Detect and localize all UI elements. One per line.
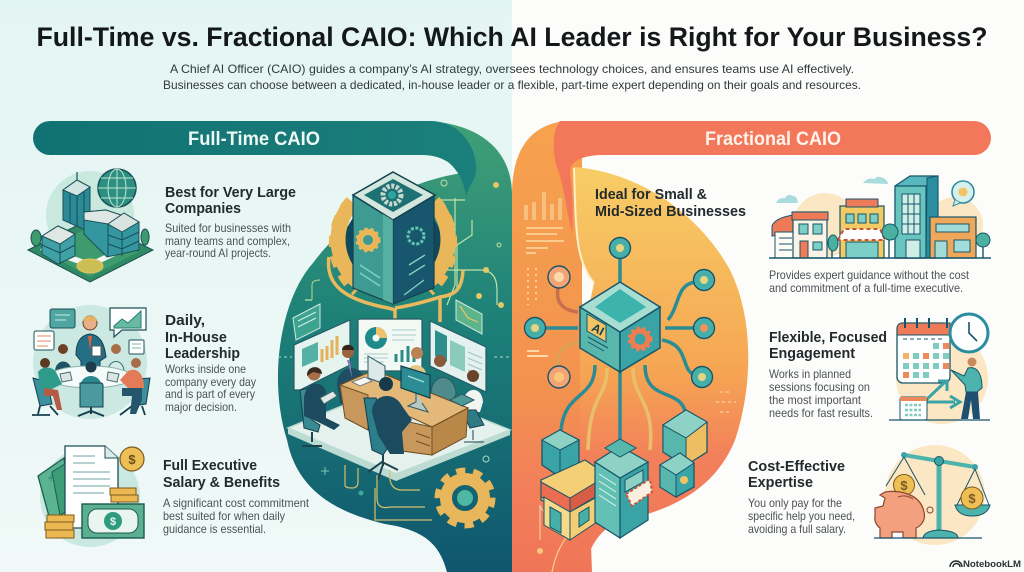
illustration: AI cube network: AI <box>589 320 606 338</box>
text block: best for very large companies <box>165 185 296 260</box>
illustration: fractional panel decorations <box>526 168 736 572</box>
text block: daily in-house leadership: Daily, <box>165 313 205 329</box>
text block: cost-effective expertise: You only pay for the <box>748 497 842 510</box>
person: woman and men far <box>411 347 423 359</box>
right background <box>512 0 1024 572</box>
chart panel: left screen <box>294 320 350 390</box>
illustration: AI cube network <box>524 238 714 540</box>
text block: best for very large companies: many teams and complex, <box>165 235 290 248</box>
person <box>968 358 976 366</box>
text block: full executive salary and benefits: Salary & Benefits <box>163 475 280 491</box>
icon: scale and piggy bank: $ <box>968 491 976 506</box>
dashed links at screen level <box>278 356 512 358</box>
text block: expert guidance: and commitment of a full-time executive. <box>769 282 963 295</box>
nodes <box>524 238 714 388</box>
piggy bank <box>875 491 924 538</box>
text block: expert guidance: Provides expert guidance without the cost <box>769 269 970 282</box>
person: front at desk <box>364 398 393 455</box>
left background <box>0 0 512 572</box>
illustration: office platform <box>288 384 510 481</box>
text block: full executive salary and benefits: A significant cost commitment <box>163 497 310 510</box>
text block: best for very large companies: Best for Very Large <box>165 185 296 201</box>
panel: fractional banner <box>554 121 991 232</box>
text block: flexible focused engagement: needs for fast results. <box>769 407 873 420</box>
banner label: Fractional CAIO: Fractional CAIO <box>705 129 841 150</box>
text block: cost-effective expertise: Expertise <box>748 475 813 491</box>
logo: NotebookLM: NotebookLM <box>963 559 1021 570</box>
teal tower <box>895 176 938 258</box>
panel: full-time banner <box>33 121 476 196</box>
person: seated left with laptop <box>300 388 320 432</box>
shop <box>541 460 600 525</box>
text block: flexible focused engagement: Flexible, Focused <box>769 330 887 346</box>
text block: full executive salary and benefits <box>163 458 310 536</box>
person: standing man back <box>337 368 368 408</box>
tower building <box>595 462 620 538</box>
circuit lines <box>305 198 497 305</box>
text block: cost-effective expertise: Cost-Effective <box>748 459 845 475</box>
back seated team <box>58 344 68 354</box>
icon: salary and money <box>38 446 144 547</box>
gear crescents <box>338 203 448 285</box>
small calendar <box>900 397 927 420</box>
icon: scale and piggy bank <box>874 445 990 545</box>
icon: leadership meeting <box>32 305 150 419</box>
text block: daily in-house leadership: Leadership <box>165 346 240 362</box>
icon: scale and piggy bank: $ <box>900 478 908 493</box>
text block: best for very large companies: year-round AI projects. <box>165 247 271 260</box>
table <box>48 366 132 388</box>
text block: best for very large companies: Suited for businesses with <box>165 222 291 235</box>
text block: flexible focused engagement: the most important <box>769 394 862 407</box>
connectors <box>545 258 695 450</box>
text block: daily in-house leadership: major decision. <box>165 401 237 414</box>
chart panel: right side small <box>456 300 482 334</box>
icon: corporate campus and globe <box>28 169 153 282</box>
icon: small business street <box>769 176 991 258</box>
chart panel: left side small <box>293 280 320 340</box>
text block: ideal for small and mid-sized businesses: Ideal for Small & <box>595 187 708 203</box>
text block: flexible focused engagement: Works in planned <box>769 368 851 381</box>
monitors <box>368 356 385 384</box>
text block: full executive salary and benefits: best suited for when daily <box>163 510 285 523</box>
text block: cost-effective expertise: specific help you need, <box>748 510 855 523</box>
text block: daily in-house leadership: Works inside one <box>165 363 246 376</box>
illustration: lower circuit and gear <box>321 456 492 525</box>
right box <box>663 410 707 466</box>
side chairs <box>33 378 150 406</box>
arrows <box>924 381 960 408</box>
icon: calendar with clock and person <box>889 314 990 424</box>
tower body <box>353 195 393 304</box>
intro text: Businesses can choose between a dedicated, in-house leader or a flexible, part-time expert depending on their goals and resources. <box>163 78 861 92</box>
text block: flexible focused engagement: sessions focusing on <box>769 381 870 394</box>
panel: full-time backdrop shape <box>278 121 512 572</box>
text block: full executive salary and benefits: Full Executive <box>163 458 257 474</box>
intro text: A Chief AI Officer (CAIO) guides a company’s AI strategy, oversees technology choices, and ensures teams use AI effectively. <box>170 62 854 76</box>
desk <box>340 370 468 427</box>
presenter <box>76 334 106 378</box>
text block: flexible focused engagement <box>769 330 887 420</box>
intro text <box>163 62 861 92</box>
dark recess behind tower <box>343 198 443 298</box>
cube <box>580 307 620 372</box>
illustration: AI tower with gears <box>305 172 504 322</box>
small cube <box>542 430 579 477</box>
trees <box>832 240 983 258</box>
icon: salary and money: $ <box>128 452 136 467</box>
banner label: Full-Time CAIO: Full-Time CAIO <box>188 129 320 150</box>
text block: daily in-house leadership: In-House <box>165 330 227 346</box>
text block: daily in-house leadership: company every day <box>165 376 256 389</box>
icon: salary and money: $ <box>110 516 116 528</box>
text block: ideal for small and mid-sized businesses: Mid-Sized Businesses <box>595 204 746 220</box>
text block: best for very large companies: Companies <box>165 201 241 217</box>
gold connector ring <box>328 257 463 322</box>
text block: cost-effective expertise: avoiding a full salary. <box>748 523 846 536</box>
panel: fractional backdrop shape <box>512 121 592 572</box>
chart panel: centre screen with pie chart <box>358 319 422 371</box>
text block: full executive salary and benefits: guidance is essential. <box>163 523 266 536</box>
red house <box>772 215 793 236</box>
title: Full-Time vs. Fractional CAIO: Which AI Leader is Right for Your Business? <box>36 22 988 52</box>
yellow shop <box>840 206 884 258</box>
illustration: desk and team <box>300 345 484 480</box>
text block: expert guidance <box>769 269 970 295</box>
text block: ideal for small and mid-sized businesses <box>595 187 746 220</box>
panel: fractional inner sunburst <box>574 167 748 572</box>
speech bubble <box>952 181 974 203</box>
text block: flexible focused engagement: Engagement <box>769 346 855 362</box>
text block: daily in-house leadership: and is part of every <box>165 388 255 401</box>
chart panel: right screen <box>430 321 486 392</box>
text block: cost-effective expertise <box>748 459 855 536</box>
orange building <box>930 217 976 258</box>
text block: daily in-house leadership <box>165 313 256 414</box>
side seated team <box>40 358 50 368</box>
small cube right <box>660 453 694 497</box>
front seat with person <box>86 362 96 372</box>
